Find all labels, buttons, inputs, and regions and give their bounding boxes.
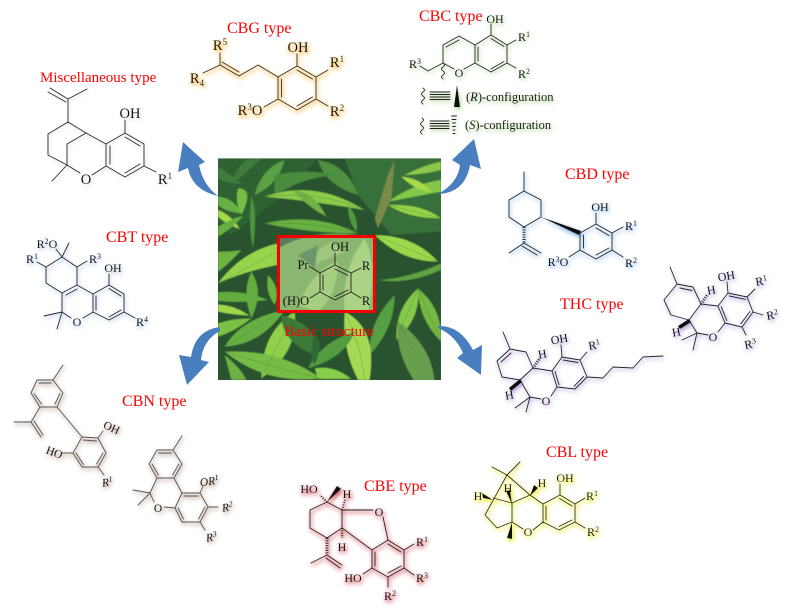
structure: THC with R groups: 2 [773,307,779,317]
structure: CBG: 4 [200,78,205,88]
structure: THC with pentyl chain: O [542,394,551,408]
structure: THC with R groups: O [709,330,718,344]
structure: CBN tricyclic: O [154,503,162,515]
structure: CBD: R [625,219,633,233]
basic structure box: (H)O [283,294,309,308]
structure: CBG: 5 [223,37,228,47]
structure: THC with R groups: R [765,308,775,323]
configuration row S: (S)-configuration [465,118,552,132]
structure: THC with pentyl chain: R [587,338,597,353]
structure: THC with R groups: 1 [762,273,768,283]
structure: CBT: 3 [97,252,101,261]
structure: THC with R groups: 3 [751,336,757,346]
structure: CBL: H [474,489,483,503]
structure: CBN tricyclic: OR [199,475,216,489]
structure: THC with R groups: H [706,282,717,298]
structure: CBE: HO [344,571,362,585]
structure: CBN tricyclic: 2 [228,499,233,509]
structure: CBD: 1 [633,219,637,228]
arrow: to THC type [438,326,482,375]
structure: THC with R groups: R [743,337,753,352]
structure: THC with pentyl chain: OH [550,331,569,347]
structure: CBD: OH [591,200,609,214]
structure: THC with pentyl chain [497,331,663,412]
structure: CBT [26,237,148,329]
structure: CBG: R [238,103,247,119]
structure: CBE: 1 [424,535,428,544]
structure: CBG: 3 [247,102,252,112]
structure: CBL: O [524,525,533,539]
structure: THC with pentyl chain: 1 [595,337,601,347]
structure: CBE: R [416,535,424,549]
structure: CBN tricyclic [133,436,234,545]
structure: CBG: R [213,38,223,54]
structure: CBN open ring: R [101,477,110,490]
structure: CBC with configuration legend: 2 [526,67,530,76]
structure: CBD: R [548,255,556,269]
structure: CBL: R [587,525,595,539]
structure: CBL: OH [556,471,574,485]
title: CBG type: CBG type [227,20,291,37]
structure: CBE: R [384,589,392,603]
structure: THC with pentyl chain: H [504,387,515,403]
structure: miscellaneous: R [158,172,168,188]
structure: CBL: H [538,476,547,490]
arrow: to CBN type [179,327,220,385]
structure: CBL: 2 [595,525,599,534]
structure: CBC with configuration legend: R [409,57,417,71]
arrow: to miscellaneous type [178,142,218,196]
structure: CBG: OH [288,40,309,56]
structure: CBT: R [26,252,34,266]
title: THC type: THC type [560,296,624,313]
structure: CBE: HO [300,482,318,496]
structure: CBN tricyclic: 1 [214,473,219,482]
structure: CBT: 2 [45,237,49,246]
structure: THC with R groups [664,267,779,352]
structure: THC with R groups: R [754,274,764,289]
structure: CBC with configuration legend [409,12,554,134]
structure: THC with R groups: H [671,324,682,340]
title: CBD type: CBD type [565,166,629,183]
basic structure box: Pr [297,258,309,272]
structure: CBG: R [190,71,200,87]
basic structure box: R [362,294,371,308]
structure: CBE: H [343,487,352,501]
structure: CBN tricyclic: R [205,532,214,545]
structure: CBL: R [586,489,594,503]
structure: CBL: H [504,481,513,495]
structure: CBN tricyclic: 3 [211,529,217,539]
structure: CBD: R [625,256,633,270]
structure: CBT: R [136,315,144,329]
structure: miscellaneous: O [81,172,91,188]
basic structure box: OH [331,240,349,254]
structure: CBN open ring [14,365,121,490]
title: Miscellaneous type: Miscellaneous type [40,70,157,86]
structure: CBC with configuration legend: OH [486,12,504,26]
structure: CBD: 2 [633,256,637,265]
configuration row S [420,116,552,134]
structure: CBT: O [49,237,58,251]
structure: CBE: 3 [424,571,428,580]
basic structure box [278,236,374,312]
structure: CBE [300,482,428,603]
structure: miscellaneous: OH [120,106,141,122]
title: CBN type: CBN type [122,393,186,410]
configuration row R: (R)-configuration [466,90,554,104]
structure: CBE: R [416,571,424,585]
structure: CBG: R [330,55,340,71]
structure: CBG: 2 [340,103,344,113]
structure: CBL [474,462,599,539]
structure: CBN tricyclic: R [221,502,230,515]
photo: cannabis leaves [218,158,441,382]
structure: CBD: O [560,255,569,269]
structure: CBG [190,37,344,120]
structure: CBG: 1 [340,54,344,64]
structure: CBC with configuration legend: 1 [526,30,530,39]
structure: miscellaneous: 1 [168,171,172,181]
structure: CBD: 3 [556,255,560,264]
structure: CBT: 1 [34,252,38,261]
structure: CBN open ring: OH [101,419,121,437]
structure: CBC with configuration legend: R [518,30,526,44]
structure: CBG: R [330,104,340,120]
structure: CBL: 1 [594,489,598,498]
structure: THC with R groups: OH [717,268,736,284]
structure: CBN open ring: HO [44,445,64,462]
structure: CBT: R [37,237,45,251]
structure: CBT: O [73,315,82,329]
structure: CBE: H [338,540,347,554]
structure: CBC with configuration legend: O [455,66,464,80]
structure: CBC with configuration legend: R [518,67,526,81]
configuration row R [422,85,554,107]
title: CBL type: CBL type [546,444,608,461]
structure: CBE: 2 [392,589,396,598]
structure: CBT: R [89,252,97,266]
basic structure label: Basic structure [284,324,374,340]
structure: miscellaneous [48,88,172,188]
title: CBT type: CBT type [106,229,168,246]
structure: THC with pentyl chain: H [537,346,548,362]
structure: CBG: O [252,103,262,119]
arrow: to CBC type [438,139,481,194]
structure: CBD [509,172,637,270]
structure: CBN open ring: 1 [108,474,113,484]
structure: CBE: O [375,505,384,519]
basic structure box: R [362,259,371,273]
structure: CBT: 4 [144,315,148,324]
title: CBC type: CBC type [419,8,483,25]
title: CBE type: CBE type [364,478,427,495]
structure: CBT: OH [104,261,122,275]
structure: CBC with configuration legend: 3 [417,57,421,66]
